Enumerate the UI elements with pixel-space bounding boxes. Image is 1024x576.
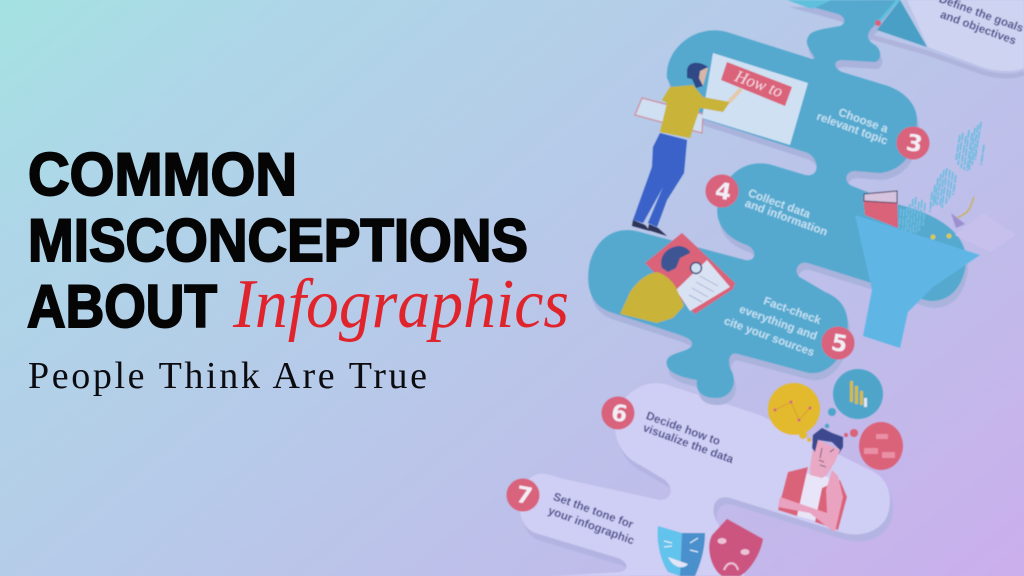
step 3 label: Choose a <box>837 107 890 136</box>
title: MISCONCEPTIONS <box>28 207 528 274</box>
icon: yellow line chart bubble <box>768 383 820 435</box>
step 3 label: relevant topic <box>815 111 890 148</box>
number badge 6: 6 <box>609 400 629 428</box>
step 7 label: Set the tone for <box>551 491 635 531</box>
icon: arm <box>778 470 843 532</box>
icon: pink table bubble <box>859 422 903 470</box>
number badge 4 <box>706 174 738 208</box>
step 7 label: your infographic <box>546 505 636 548</box>
icon: blue bar chart bubble <box>833 369 883 419</box>
number badge 5 <box>822 326 854 360</box>
icon: funnel <box>855 215 980 348</box>
icon: hair <box>812 428 843 455</box>
icon: gold squiggle <box>957 197 974 218</box>
icon: open book behind person <box>635 98 703 133</box>
icon: laptop sheet <box>955 213 1016 252</box>
icon: gold data dots <box>930 234 952 240</box>
panel: step 2 goals pill: and objectives <box>938 9 1018 47</box>
number badge 3: 3 <box>904 130 924 158</box>
step 6 label: visualize the data <box>641 422 735 466</box>
illustration: how-to board and person <box>632 53 808 236</box>
icon: thought dots <box>799 408 858 442</box>
icon: document <box>676 260 730 311</box>
title: ABOUT <box>27 273 217 340</box>
panel: step 2 goals pill <box>868 0 1024 76</box>
icon: person hair <box>661 246 690 272</box>
script word: Infographics: Infographics <box>232 266 569 343</box>
icon: data streams <box>899 122 984 235</box>
icon: top triangle and pin <box>787 0 927 47</box>
title: COMMON <box>28 141 297 208</box>
icon: man hair and beard <box>687 63 708 88</box>
icon: small purple triangle <box>951 213 965 228</box>
icon: man shoes <box>632 220 667 236</box>
icon: man face <box>695 68 708 86</box>
illustration: data funnel <box>855 122 1016 348</box>
icon: red vest <box>778 467 847 530</box>
step 4 label: Collect data <box>746 187 812 221</box>
icon: facial features <box>819 448 834 467</box>
panel: lavender pills shadow <box>522 390 893 576</box>
illustration: theatre masks <box>657 519 763 576</box>
number badge 7 <box>506 478 540 512</box>
icon: sad mask <box>709 519 763 576</box>
number badge 4: 4 <box>713 178 733 206</box>
icon: man hand <box>729 89 741 102</box>
step 4 label: and information <box>743 198 829 239</box>
step 5 label: cite your sources <box>722 315 816 359</box>
title <box>27 141 528 340</box>
icon: man shirt <box>660 85 730 138</box>
number badge 6 <box>602 396 634 430</box>
teal ribbon for steps 3, 4 and 5 <box>588 0 966 398</box>
step 5 label: Fact-check <box>762 295 823 327</box>
icon: red clipboard <box>645 233 735 314</box>
icon: happy mask <box>657 526 705 576</box>
step 5 label <box>722 295 823 359</box>
icon: how-to sign: How to <box>731 66 785 101</box>
number badge 7: 7 <box>514 482 534 510</box>
icon: person body <box>620 272 684 323</box>
icon: red book <box>863 191 898 228</box>
step 5 label: everything and <box>738 304 819 343</box>
illustration: fact-checking person <box>620 233 735 323</box>
subtitle: People Think Are True <box>28 355 427 397</box>
icon: how-to sign <box>721 62 792 106</box>
number badge 5: 5 <box>829 330 849 358</box>
teal ribbon shadow <box>590 7 968 405</box>
icon: white board <box>702 53 808 145</box>
illustration: thinking man <box>768 369 903 532</box>
icon: magnifier <box>690 262 702 274</box>
number badge 3 <box>896 126 930 160</box>
illustrated infographic panel <box>506 0 1024 576</box>
panel: lavender pills for steps 6 and 7 <box>519 383 890 576</box>
step 6 label: Decide how to <box>644 410 722 448</box>
icon: shirt <box>797 473 835 523</box>
icon: man pants <box>633 133 687 227</box>
icon: face <box>810 440 840 478</box>
